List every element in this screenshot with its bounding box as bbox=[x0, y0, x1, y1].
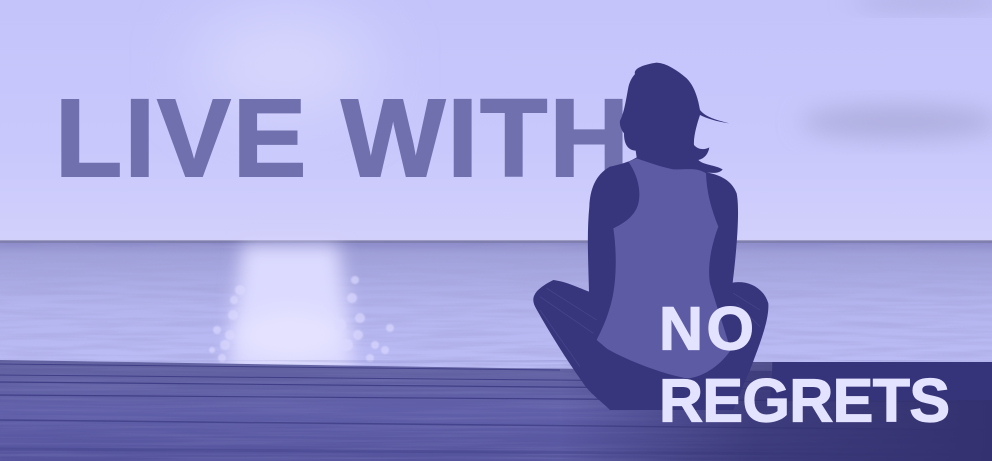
trouser stripes bbox=[540, 288, 760, 367]
sun reflection on water bbox=[209, 245, 394, 372]
sea bbox=[0, 240, 992, 371]
heading: no regrets bbox=[659, 294, 950, 434]
woman silhouette bbox=[533, 63, 768, 410]
heading: no regrets: NO bbox=[659, 294, 754, 362]
wooden deck bbox=[0, 360, 992, 461]
heading: no regrets: REGRETS bbox=[659, 366, 950, 434]
sleeveless top bbox=[597, 158, 731, 378]
body and hair bbox=[533, 63, 768, 410]
heading: live with: LIVE WITH bbox=[55, 77, 629, 200]
dark block on deck bbox=[770, 362, 992, 400]
sky background bbox=[0, 0, 992, 245]
